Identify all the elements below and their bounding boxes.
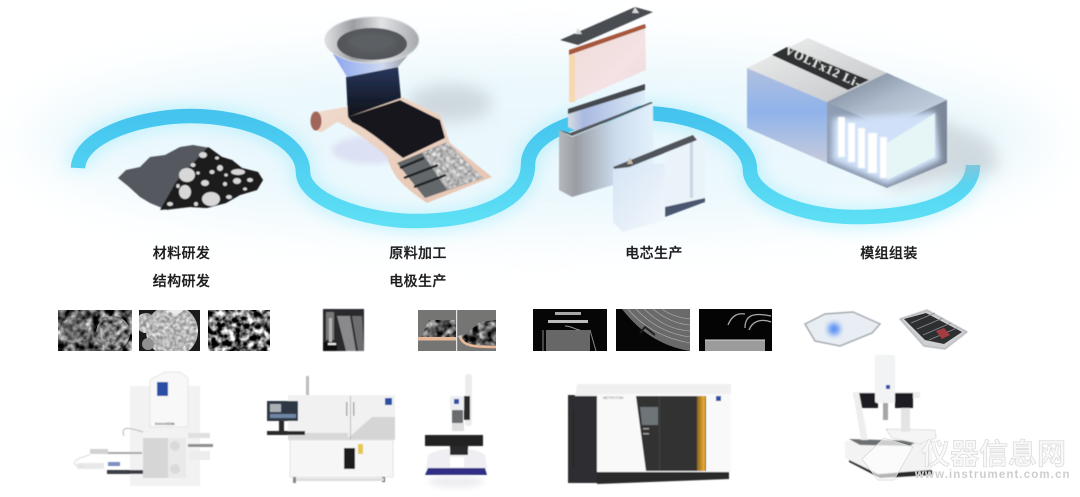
bridge — [853, 392, 920, 398]
copper foil — [312, 97, 492, 203]
aluminium case — [559, 103, 654, 197]
base — [597, 472, 729, 484]
icon: raw material pile — [118, 145, 263, 210]
thumbnail: sectioned particles — [139, 310, 200, 351]
blue process ribbon — [78, 113, 973, 221]
light tower — [306, 376, 309, 395]
upper cabinet — [288, 395, 395, 440]
thumbnail: electrode cross-section panes — [323, 309, 364, 351]
thumbnail: electrode coating sections — [418, 310, 496, 351]
column — [875, 355, 895, 403]
left dark side — [568, 395, 597, 483]
copper electrode panel — [569, 25, 646, 103]
label band — [772, 47, 869, 90]
base white — [845, 440, 932, 474]
thumbnail: particle micrograph — [58, 310, 132, 351]
watermark logo — [862, 438, 913, 480]
icon: coating ribbon with hopper — [310, 17, 492, 203]
logo — [716, 396, 721, 401]
watermark — [862, 438, 1071, 481]
label: raw material processing: 原料加工 — [389, 245, 447, 261]
blue foot — [425, 468, 487, 475]
column — [150, 372, 188, 427]
base — [426, 448, 487, 470]
front face — [613, 163, 665, 232]
thumbnail: CT slice 2 — [616, 309, 690, 351]
instrument: coordinate measuring machine — [845, 355, 936, 478]
watermark name: 仪器信息网 — [921, 438, 1066, 471]
stage — [425, 435, 483, 446]
icon: battery cell exploded view — [559, 7, 705, 232]
instrument: light microscope — [425, 374, 487, 488]
module text: VOLTx12 Li- — [783, 43, 864, 91]
stage labels — [153, 245, 918, 289]
dark base edge — [665, 198, 705, 217]
under shadow — [332, 136, 408, 164]
back panels — [130, 386, 200, 486]
instrument: CT system — [568, 384, 731, 484]
top face — [747, 38, 887, 102]
top — [575, 384, 731, 396]
bowl — [325, 17, 419, 63]
model text: GeminiSEM — [155, 422, 175, 426]
arm — [465, 374, 472, 426]
icon: battery module — [747, 38, 1000, 190]
logo — [385, 398, 392, 405]
reflection — [428, 476, 484, 488]
label: structure: 结构研发 — [153, 273, 210, 289]
lower cabinet — [290, 440, 393, 477]
instrument: SEM microscope — [74, 372, 213, 486]
logo — [157, 382, 168, 396]
shelf — [267, 431, 305, 435]
label: cell production: 电芯生产 — [625, 245, 683, 261]
hopper cone — [333, 54, 409, 77]
door — [636, 396, 706, 471]
foil layer — [397, 142, 483, 198]
white body — [597, 394, 731, 472]
shadow — [408, 84, 492, 122]
inner cell — [568, 85, 645, 132]
transparent end — [827, 73, 947, 188]
terminal cover — [560, 7, 653, 45]
instrument: X-ray system — [267, 376, 395, 483]
screen — [640, 407, 658, 425]
left side face — [747, 68, 827, 163]
thumbnail: module tray dark — [900, 310, 967, 349]
head — [450, 396, 464, 410]
coating black — [348, 100, 445, 158]
right arms — [188, 433, 213, 460]
amber light — [697, 396, 705, 471]
glass rear side — [665, 135, 705, 216]
base dark — [849, 458, 932, 478]
vertical strip — [346, 67, 401, 117]
label: module assembly: 模组组装 — [860, 245, 918, 261]
table — [886, 429, 936, 444]
shadow — [880, 100, 1000, 190]
thumbnail: CT slice 1 — [533, 309, 607, 351]
thumbnail: CT slice 3 — [699, 309, 772, 351]
thumbnail: module tray lit — [805, 312, 880, 346]
label: materials: 材料研发 — [153, 245, 210, 261]
model text: METROTOM — [603, 396, 623, 400]
monitor — [267, 401, 298, 421]
glowing cells — [832, 112, 940, 184]
label: electrode production: 电极生产 — [389, 273, 447, 289]
top band — [613, 135, 697, 172]
probe — [883, 403, 888, 420]
watermark url: www.instrument.com.cn — [914, 469, 1071, 481]
chamber — [143, 429, 188, 482]
legs — [853, 392, 868, 440]
thumbnail: rough particles — [208, 310, 270, 351]
left arms — [74, 428, 143, 474]
